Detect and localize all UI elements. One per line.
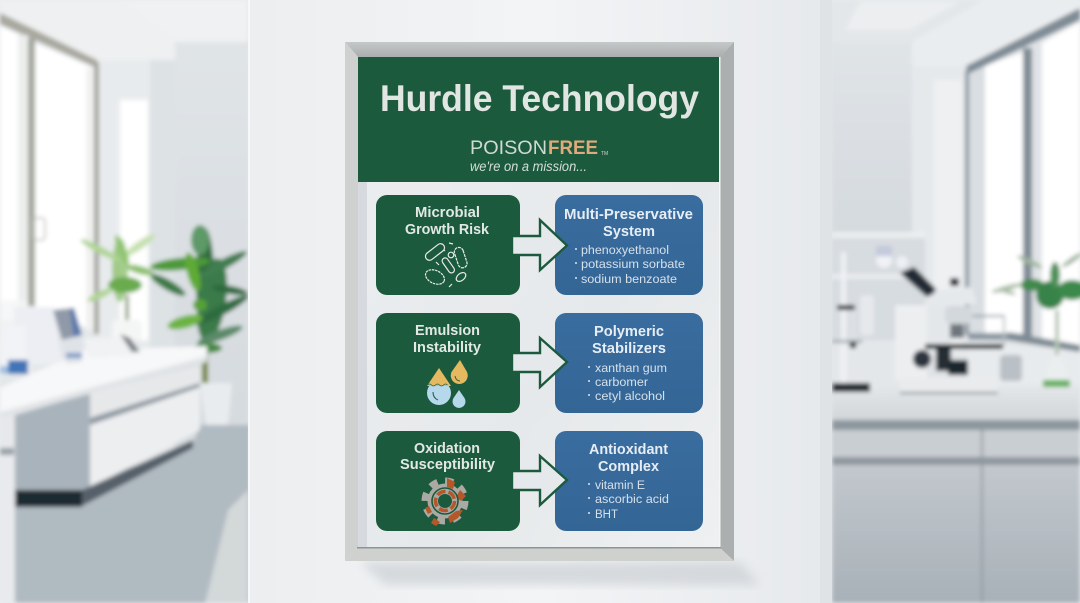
- icon: droplets: [427, 360, 468, 408]
- logo: TM: [601, 151, 608, 157]
- flask and plant: [991, 251, 1080, 387]
- row 1: arrow: [512, 220, 567, 270]
- row 3: solution card: [555, 431, 703, 531]
- row 2: solution card: [555, 313, 703, 413]
- lab instrument: [0, 307, 140, 376]
- central wall panel: [248, 0, 832, 603]
- logo: POISON: [470, 137, 547, 159]
- row 1: solution card: potassium sorbate: [581, 257, 685, 271]
- shelves: [832, 232, 925, 387]
- background: right lab scene: [830, 0, 1080, 603]
- row 2: solution card: carbomer: [595, 375, 648, 389]
- row 1: solution card: [555, 195, 703, 295]
- microscope: [895, 267, 1005, 394]
- counter: [832, 340, 902, 385]
- row 3: solution card: Antioxidant: [589, 442, 668, 458]
- logo: we're on a mission...: [470, 159, 587, 174]
- lab bench: [15, 393, 90, 490]
- poster header band: [358, 57, 719, 182]
- background: left lab scene: [0, 0, 251, 603]
- icon: rusty gear: [425, 478, 466, 526]
- row 3: problem card: [376, 431, 520, 531]
- row 2: solution card: Stabilizers: [592, 341, 666, 357]
- logo: FREE: [548, 137, 598, 159]
- row 3: solution card: BHT: [595, 507, 619, 521]
- row 1: solution card: Multi-Preservative: [564, 207, 693, 223]
- row 3: problem card: Susceptibility: [400, 457, 495, 473]
- retort stand: [832, 252, 870, 392]
- row 3: arrow: [512, 456, 567, 505]
- row 3: solution card: ascorbic acid: [595, 492, 669, 506]
- row 3: solution card: vitamin E: [595, 478, 645, 492]
- floor: [15, 425, 250, 603]
- row 2: solution card: Polymeric: [594, 324, 664, 340]
- row 1: solution card: phenoxyethanol: [581, 243, 669, 257]
- row 3: problem card: Oxidation: [414, 441, 480, 457]
- row 1: problem card: Microbial: [415, 205, 480, 221]
- row 1: problem card: [376, 195, 520, 295]
- plant: large palm: [148, 225, 251, 425]
- poster frame: [345, 42, 734, 561]
- row 1: solution card: sodium benzoate: [581, 272, 677, 286]
- poster sheet: [358, 57, 720, 547]
- row 1: problem card: Growth Risk: [405, 222, 490, 238]
- row 2: arrow: [512, 338, 567, 387]
- row 2: problem card: [376, 313, 520, 413]
- title: Hurdle Technology: [380, 78, 699, 119]
- logo: [470, 137, 608, 174]
- row 2: solution card: cetyl alcohol: [595, 389, 665, 403]
- row 2: solution card: xanthan gum: [595, 361, 667, 375]
- row 3: solution card: Complex: [598, 459, 659, 475]
- row 2: problem card: Emulsion: [415, 323, 480, 339]
- plant: small pale: [79, 231, 157, 340]
- icon: bacteria: [423, 242, 468, 287]
- row 1: solution card: System: [603, 224, 655, 240]
- row 2: problem card: Instability: [413, 340, 481, 356]
